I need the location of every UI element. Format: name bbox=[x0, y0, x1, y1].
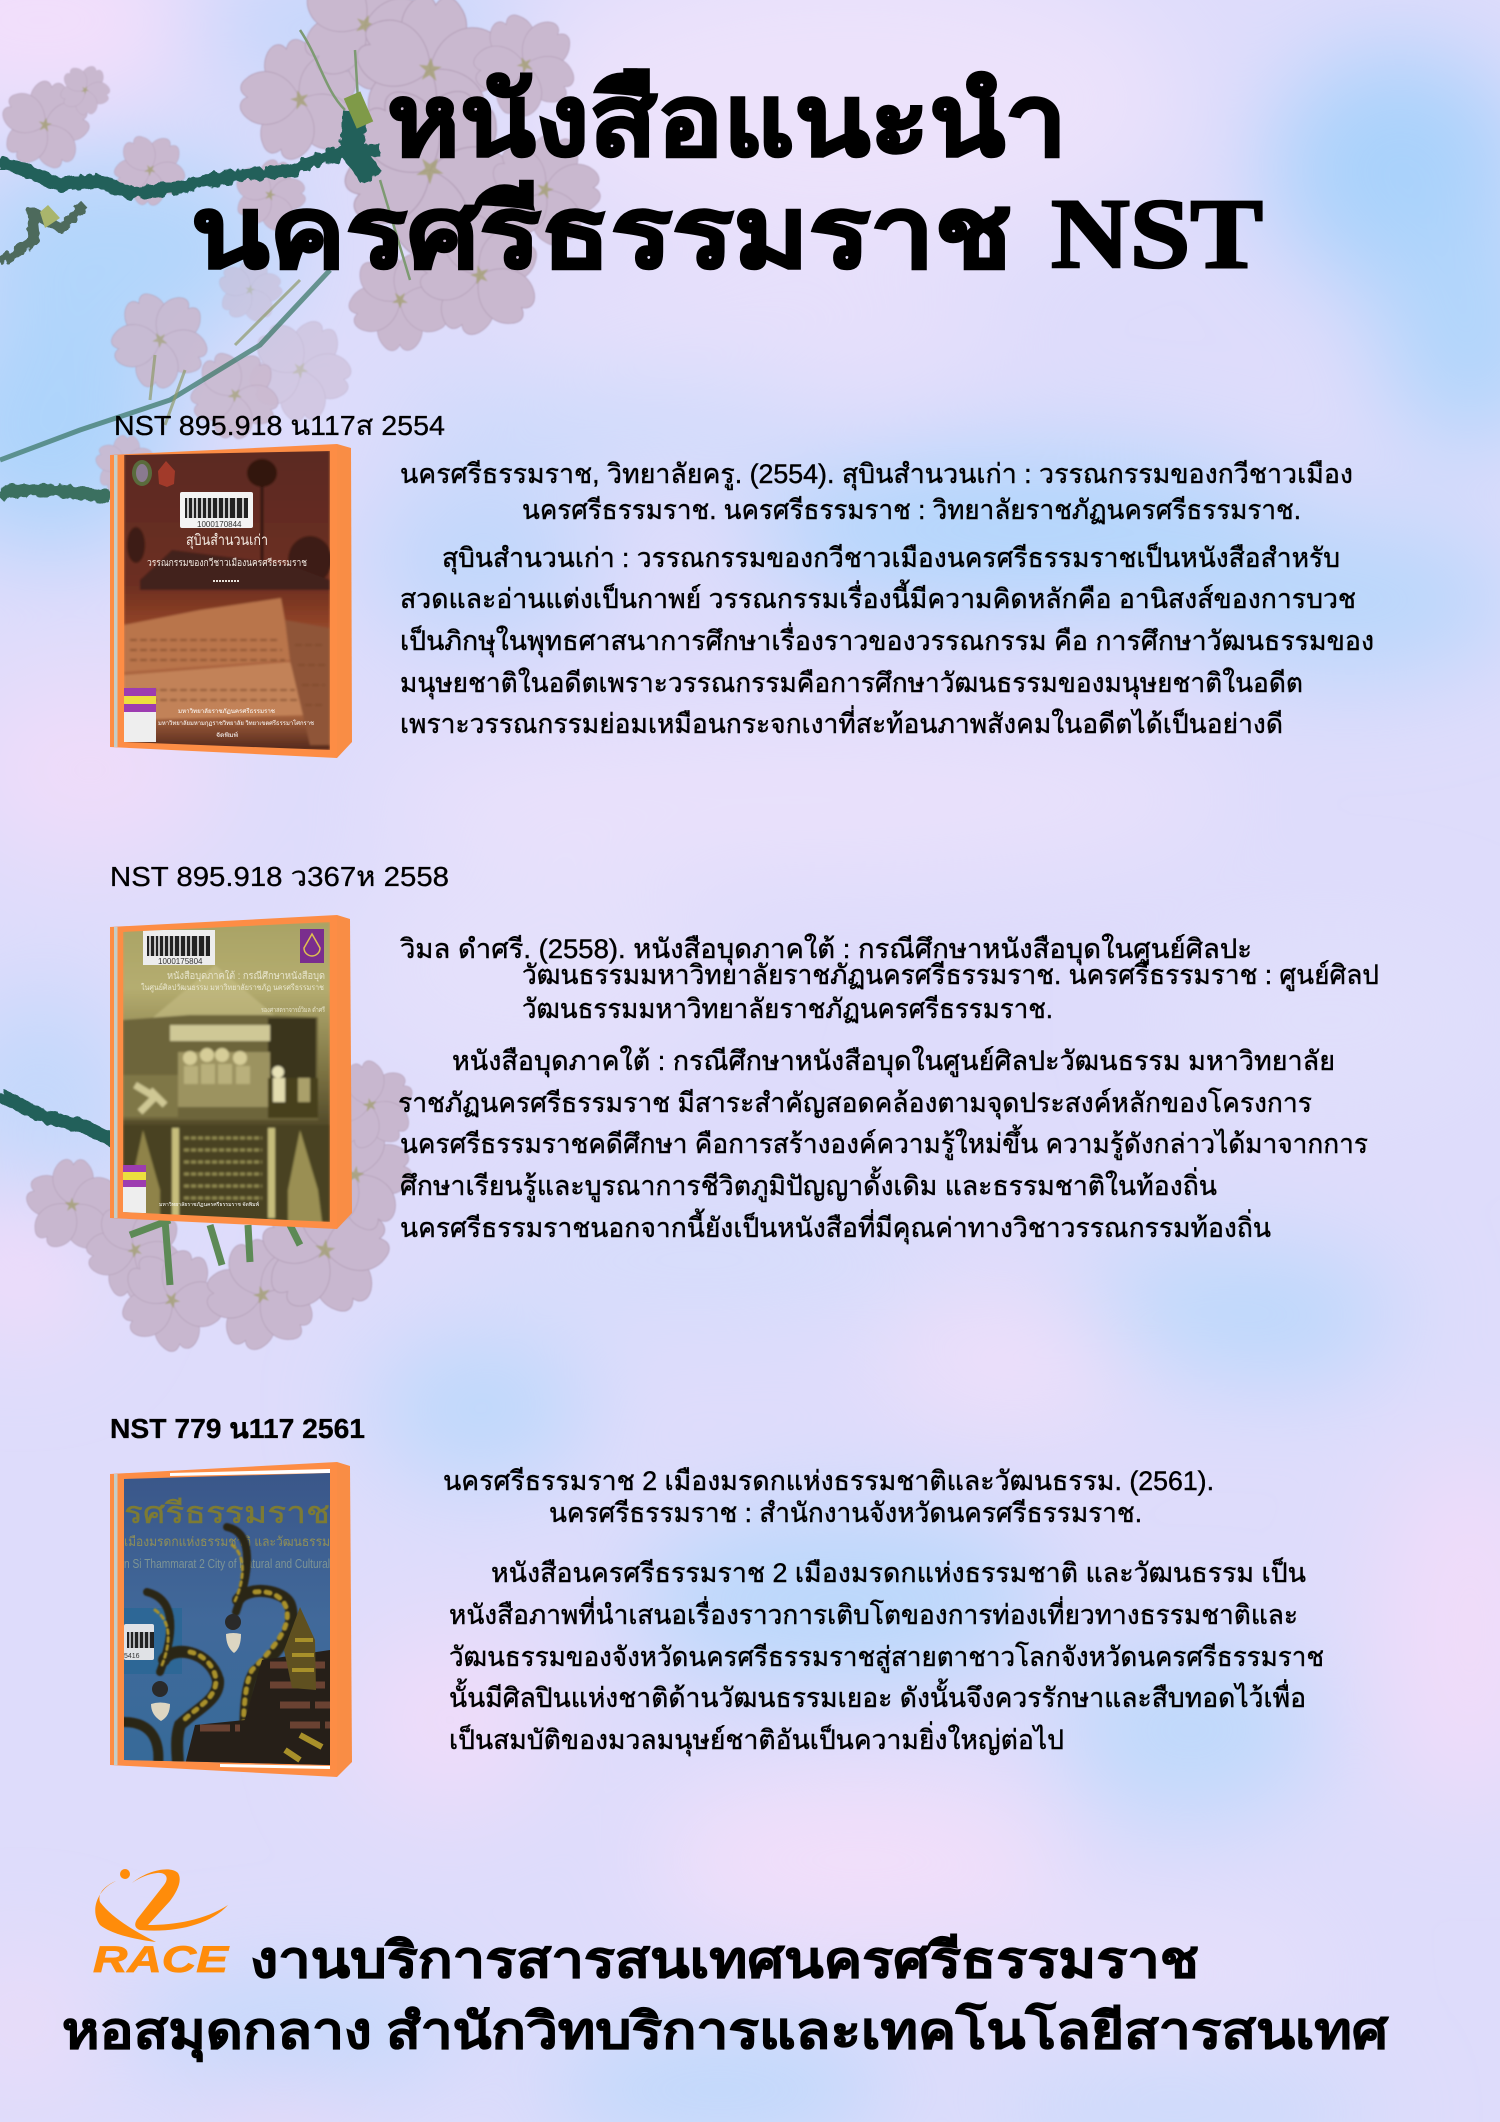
book cover 2: รองศาสตราจารย์วิมล ดำศรี bbox=[261, 1006, 325, 1014]
cherry blossom branch: lower bbox=[0, 1042, 432, 1367]
reference and summary: book 1: สุบินสำนวนเก่า : วรรณกรรมของกวีชาวเมืองนครศรีธรรมราชเป็นหนังสือสำหรับ bbox=[442, 540, 1340, 575]
book cover 2: 1000175804 bbox=[158, 957, 203, 966]
footer heading: งานบริการสารสนเทศนครศรีธรรมราช bbox=[250, 1932, 1199, 1988]
call number 1: NST 895.918 น117ส 2554 bbox=[114, 410, 445, 441]
reference and summary: book 3: นครศรีธรรมราช 2 เมืองมรดกแห่งธรรมชาติและวัฒนธรรม. (2561). bbox=[443, 1466, 1214, 1496]
call number 2: NST 895.918 ว367ห 2558 bbox=[110, 861, 449, 892]
reference and summary: book 3: หนังสือนครศรีธรรมราช 2 เมืองมรดกแห่งธรรมชาติ และวัฒนธรรม เป็น bbox=[491, 1555, 1306, 1588]
footer heading bbox=[62, 1932, 1389, 2062]
title: หนังสือแนะนำ bbox=[387, 66, 1067, 177]
reference and summary: book 1: นครศรีธรรมราช, วิทยาลัยครู. (2554). สุบินสำนวนเก่า : วรรณกรรมของกวีชาวเมือง bbox=[400, 459, 1353, 491]
reference and summary: book 3: นครศรีธรรมราช : สำนักงานจังหวัดนครศรีธรรมราช. bbox=[549, 1498, 1142, 1528]
reference and summary: book 2: วัฒนธรรมมหาวิทยาลัยราชภัฏนครศรีธรรมราช. นครศรีธรรมราช : ศูนย์ศิลป bbox=[522, 959, 1379, 991]
book cover 3: n Si Thammarat 2 City of Natural and Cultural bbox=[124, 1556, 330, 1571]
title: NST bbox=[1051, 178, 1263, 289]
title bbox=[191, 66, 1263, 289]
book cover 1: มหาวิทยาลัยมหามกุฏราชวิทยาลัย วิทยาเขตศรีธรรมาโศกราช bbox=[158, 719, 314, 727]
book cover 1: สุบินสำนวนเก่า bbox=[186, 532, 268, 550]
reference and summary: book 3: เป็นสมบัติของมวลมนุษย์ชาติอันเป็นความยิ่งใหญ่ต่อไป bbox=[449, 1721, 1064, 1757]
reference and summary: book 2: นครศรีธรรมราชนอกจากนี้ยังเป็นหนังสือที่มีคุณค่าทางวิชาวรรณกรรมท้องถิ่น bbox=[400, 1208, 1271, 1245]
book cover 2: ในศูนย์ศิลปวัฒนธรรม มหาวิทยาลัยราชภัฏ นครศรีธรรมราช bbox=[141, 982, 325, 993]
reference and summary: book 2: ราชภัฏนครศรีธรรมราช มีสาระสำคัญสอดคล้องตามจุดประสงค์หลักของโครงการ bbox=[398, 1087, 1312, 1120]
reference and summary: book 1: มนุษยชาติในอดีตเพราะวรรณกรรมคือการศึกษาวัฒนธรรมของมนุษยชาติในอดีต bbox=[400, 667, 1303, 700]
book cover 3: เมืองมรดกแห่งธรรมชาติ และวัฒนธรรม bbox=[124, 1534, 330, 1549]
reference and summary: book 1: เป็นภิกษุในพุทธศาสนาการศึกษาเรื่องราวของวรรณกรรม คือ การศึกษาวัฒนธรรมของ bbox=[400, 622, 1374, 658]
reference and summary: book 1: นครศรีธรรมราช. นครศรีธรรมราช : วิทยาลัยราชภัฏนครศรีธรรมราช. bbox=[522, 495, 1301, 525]
book cover 1: วรรณกรรมของกวีชาวเมืองนครศรีธรรมราช bbox=[147, 557, 307, 569]
reference and summary: book 2: ศึกษาเรียนรู้และบูรณาการชีวิตภูมิปัญญาดั้งเดิม และธรรมชาติในท้องถิ่น bbox=[400, 1166, 1217, 1202]
cherry blossom branch: top bbox=[0, 0, 617, 499]
book cover 2: มหาวิทยาลัยราชภัฏนครศรีธรรมราช จัดพิมพ์ bbox=[159, 1201, 259, 1208]
reference and summary: book 3: วัฒนธรรมของจังหวัดนครศรีธรรมราชสู่สายตาชาวโลกจังหวัดนครศรีธรรมราช bbox=[449, 1642, 1324, 1673]
reference and summary: book 3 bbox=[443, 1466, 1324, 1757]
reference and summary: book 1 bbox=[400, 459, 1374, 739]
reference and summary: book 1: เพราะวรรณกรรมย่อมเหมือนกระจกเงาที่สะท้อนภาพสังคมในอดีตได้เป็นอย่างดี bbox=[400, 705, 1283, 739]
book cover 3: รศรีธรรมราช bbox=[124, 1497, 330, 1530]
call number 3: NST 779 น117 2561 bbox=[110, 1413, 365, 1444]
book cover 1 bbox=[110, 444, 352, 758]
book cover 3: 5416 bbox=[124, 1653, 140, 1660]
reference and summary: book 2: นครศรีธรรมราชคดีศึกษา คือการสร้างองค์ความรู้ใหม่ขึ้น ความรู้ดังกล่าวได้มาจากการ bbox=[400, 1124, 1368, 1160]
title: นครศรีธรรมราช bbox=[191, 178, 1012, 289]
book cover 1: 1000170844 bbox=[197, 520, 242, 529]
reference and summary: book 2: หนังสือบุดภาคใต้ : กรณีศึกษาหนังสือบุดในศูนย์ศิลปะวัฒนธรรม มหาวิทยาลัย bbox=[452, 1045, 1335, 1078]
reference and summary: book 1: สวดและอ่านแต่งเป็นกาพย์ วรรณกรรมเรื่องนี้มีความคิดหลักคือ อานิสงส์ของการบวช bbox=[400, 579, 1356, 614]
book cover 1: มหาวิทยาลัยราชภัฏนครศรีธรรมราช bbox=[178, 707, 275, 715]
reference and summary: book 3: หนังสือภาพที่นำเสนอเรื่องราวการเติบโตของการท่องเที่ยวทางธรรมชาติและ bbox=[449, 1596, 1298, 1630]
logo: RACE: RACE bbox=[93, 1939, 230, 1980]
reference and summary: book 3: นั้นมีศิลปินแห่งชาติด้านวัฒนธรรมเยอะ ดังนั้นจึงควรรักษาและสืบทอดไว้เพื่อ bbox=[449, 1678, 1306, 1713]
book cover 1: จัดพิมพ์ bbox=[216, 731, 238, 739]
book cover 3 bbox=[110, 1462, 352, 1777]
reference and summary: book 2 bbox=[398, 933, 1379, 1245]
footer heading: หอสมุดกลาง สำนักวิทบริการและเทคโนโลยีสารสนเทศ bbox=[62, 2001, 1389, 2062]
book cover 2 bbox=[110, 915, 352, 1229]
reference and summary: book 2: วิมล ดำศรี. (2558). หนังสือบุดภาคใต้ : กรณีศึกษาหนังสือบุดในศูนย์ศิลปะ bbox=[400, 933, 1252, 966]
book cover 2: หนังสือบุดภาคใต้ : กรณีศึกษาหนังสือบุด bbox=[167, 970, 325, 982]
reference and summary: book 2: วัฒนธรรมมหาวิทยาลัยราชภัฏนครศรีธรรมราช. bbox=[522, 994, 1053, 1024]
logo: RACE bbox=[93, 1869, 230, 1980]
